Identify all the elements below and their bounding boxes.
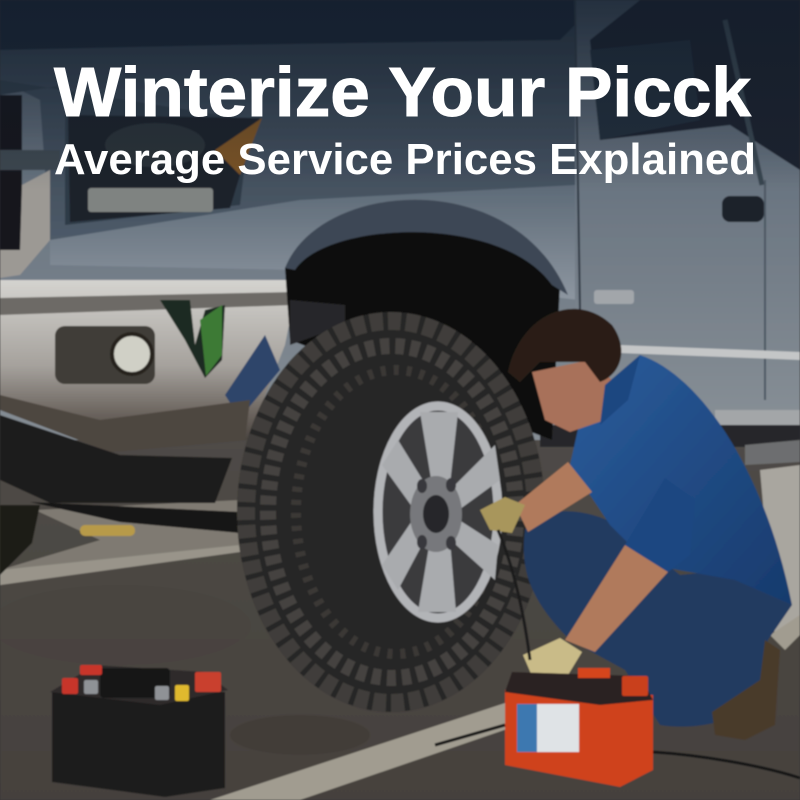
torso shirt [570, 355, 792, 605]
head [532, 360, 612, 432]
wheel rim [374, 402, 502, 622]
subtitle: Average Service Prices Explained [54, 135, 756, 184]
ground cable [435, 725, 800, 778]
boot [712, 640, 780, 740]
pickup truck body [0, 0, 800, 465]
top shade [0, 0, 800, 190]
legs [524, 511, 792, 727]
black battery [50, 665, 228, 797]
mechanic [480, 309, 792, 740]
wheel well [285, 200, 568, 440]
tire and wheel [237, 312, 545, 712]
sleeve [625, 478, 695, 572]
chrome bumper [0, 280, 298, 452]
air hose [498, 530, 530, 660]
title [54, 53, 756, 184]
gloves [480, 497, 525, 533]
hair [508, 309, 621, 382]
collar [600, 355, 640, 425]
forearm [565, 545, 668, 652]
headlight [0, 80, 262, 278]
red battery [505, 668, 653, 787]
lower valance [0, 415, 240, 575]
title: Winterize Your Picck [54, 53, 751, 131]
